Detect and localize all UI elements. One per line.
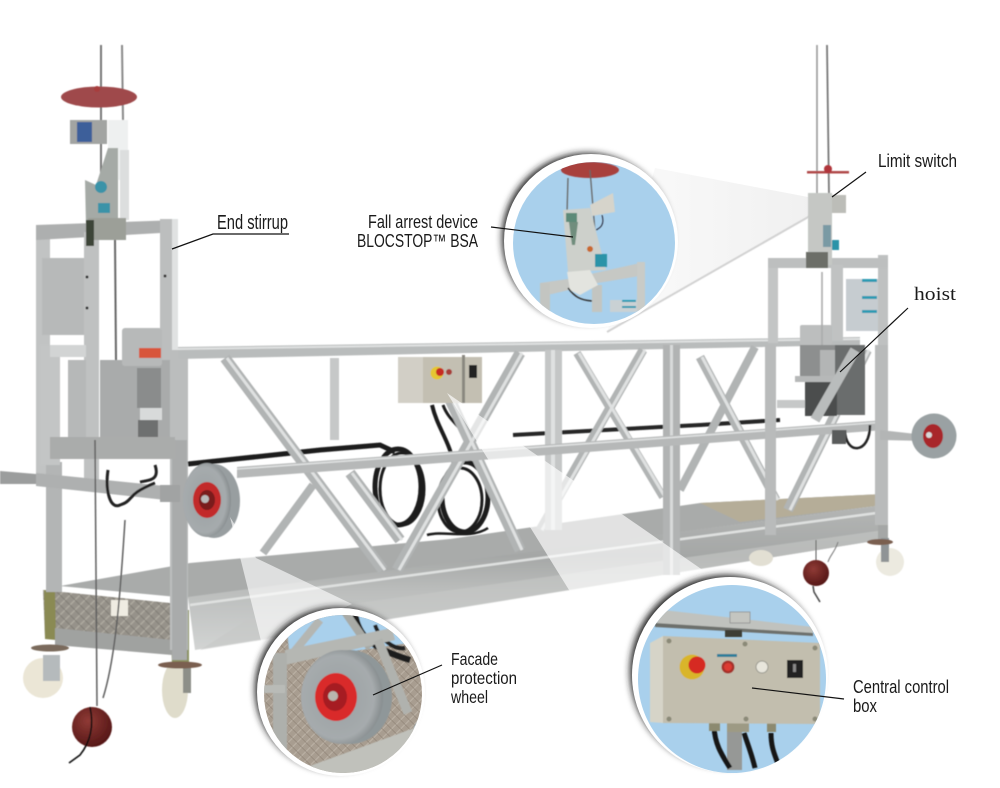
label: fall arrest device: BLOCSTOP™ BSA: [357, 231, 478, 251]
right wheel: [912, 414, 956, 458]
label: facade protection wheel: protection: [451, 668, 517, 688]
label: hoist: hoist: [914, 285, 957, 305]
label: hoist: [840, 285, 957, 372]
label: limit switch: Limit switch: [878, 151, 957, 171]
label: facade protection wheel: [373, 649, 517, 707]
end diamond plate: [43, 590, 189, 668]
right stirrup: [765, 255, 888, 535]
label: fall arrest device: Fall arrest device: [368, 212, 478, 232]
callout cone: control box: [447, 393, 720, 632]
label: facade protection wheel: wheel: [450, 687, 488, 707]
label: central control box: [752, 677, 949, 716]
black cable on rail: [188, 420, 780, 464]
label: fall arrest device: [357, 212, 573, 251]
left arm and cables: [0, 465, 180, 506]
label: facade protection wheel: Facade: [451, 649, 498, 669]
magnifier: fall arrest device: [502, 153, 678, 328]
right hoist: [795, 325, 865, 420]
callout cone: facade wheel: [230, 517, 352, 645]
label: central control box: box: [853, 696, 877, 716]
right arm and cable: [832, 425, 925, 448]
label: central control box: Central control: [853, 677, 949, 697]
central control box on rail: [398, 355, 482, 403]
cable coils: [375, 405, 488, 535]
left fall arrest and limit switch: [61, 45, 137, 246]
right fall arrest and limit switch: [806, 45, 849, 345]
label: end stirrup: [172, 212, 289, 249]
casters: [23, 538, 904, 718]
magnifier: facade wheel: [255, 607, 430, 788]
label: end stirrup: End stirrup: [217, 212, 288, 234]
floor and front beam: [60, 494, 884, 650]
label: limit switch: [832, 151, 957, 197]
callout cone: limit switch to magnifier: [607, 168, 817, 332]
left stirrup: [36, 219, 188, 660]
hanging counterweights: [69, 440, 838, 763]
magnifier: central control box: [630, 575, 828, 773]
left hoist: [50, 240, 175, 459]
left wheel: [183, 463, 240, 538]
truss rails and diagonals: [178, 337, 885, 575]
